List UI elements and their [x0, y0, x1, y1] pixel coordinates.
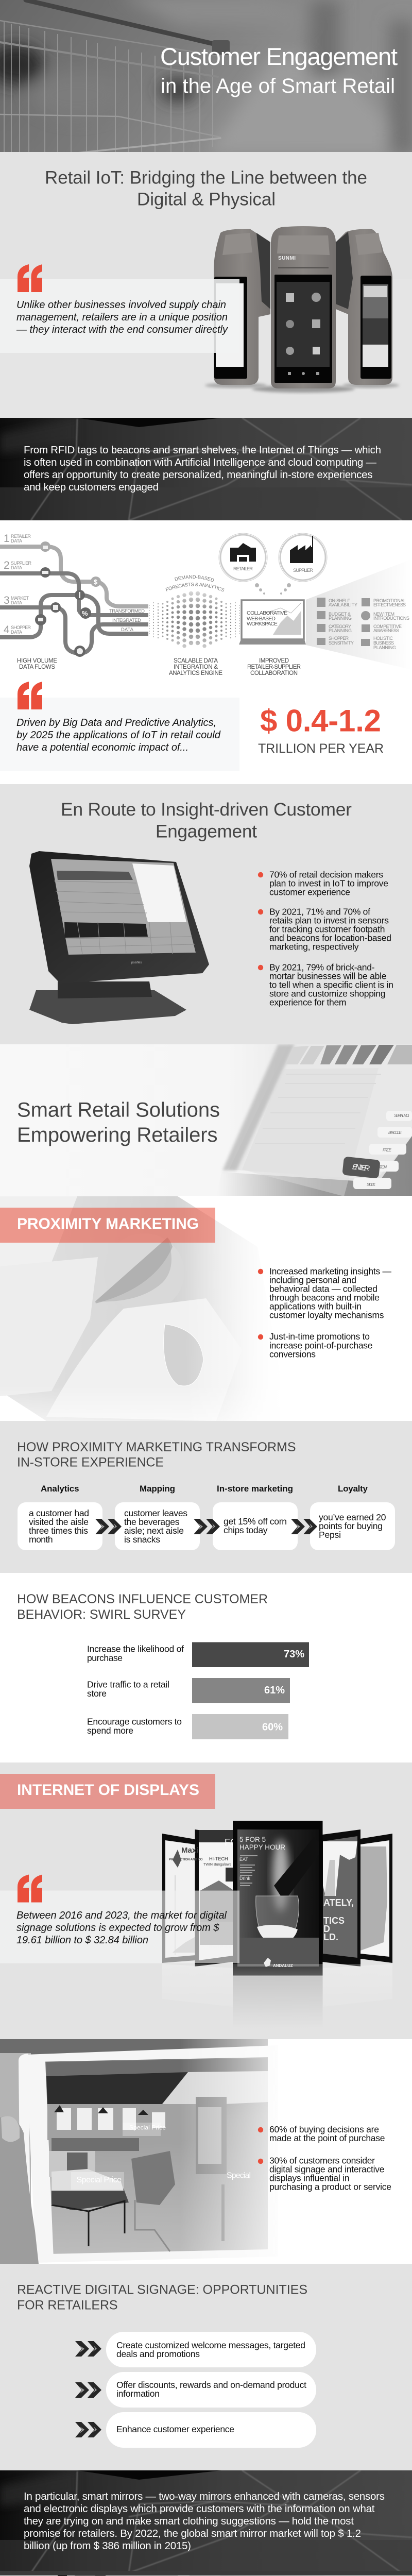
quote text [16, 1910, 227, 1946]
bullet list: retails plan to invest in sensors [269, 916, 389, 926]
diagram: data flows: CATEGORY [329, 624, 351, 629]
bullet list: plan to invest in IoT to improve [269, 878, 388, 888]
panel: how proximity marketing transforms [0, 1421, 412, 1573]
step: in-store marketing [213, 1484, 298, 1550]
diagram: data flows: SHOPPER [329, 636, 349, 641]
image: digital signage displays: Real Estate [209, 1944, 234, 1950]
diagram: data flows: SHOPPER [11, 625, 31, 630]
step: in-store marketing: get 15% off corn [224, 1516, 287, 1527]
image: digital signage displays: PRODUCTION AND CO [169, 1858, 203, 1861]
bar chart: Drive traffic to a retail [87, 1680, 169, 1690]
section banner: INTERNET OF DISPLAYS [17, 1782, 199, 1799]
statement text: and keep customers engaged [24, 481, 159, 493]
quote text: 19.61 billion to $ 32.84 billion [16, 1935, 148, 1946]
diagram: data flows: WEB-BASED [247, 616, 276, 622]
step: in-store marketing: In-store marketing [217, 1484, 293, 1494]
panel: reactive digital signage [0, 2264, 412, 2470]
heading: HOW BEACONS INFLUENCE CUSTOMER [17, 1592, 268, 1606]
image: digital signage displays: ATELY, [323, 1897, 354, 1908]
heading [17, 2283, 307, 2312]
title [160, 43, 398, 97]
step: loyalty: Pepsi [319, 1530, 341, 1540]
statement text [24, 2490, 385, 2552]
diagram: data flows [0, 533, 409, 676]
list item: welcome messages: Create customized welcome messages, targeted [116, 2340, 305, 2350]
quote text: — they interact with the end consumer directly [16, 324, 228, 335]
diagram: data flows: IMPROVED [259, 658, 289, 664]
icon: quotation mark [18, 264, 42, 292]
title: Customer Engagement [160, 43, 398, 70]
diagram: data flows: SENSITIVITY [329, 640, 354, 646]
image: digital signage displays: HAPPY HOUR [239, 1843, 285, 1851]
heading: FOR RETAILERS [17, 2298, 118, 2312]
step: mapping [115, 1484, 200, 1550]
section banner [0, 1208, 215, 1243]
bullet list: and beacons for location-based [269, 933, 391, 943]
panel: how beacons influence behavior [0, 1573, 412, 1762]
bullet list: increase point-of-purchase [269, 1340, 373, 1350]
arrow: chevrons [194, 1519, 220, 1534]
image: handheld POS terminals: SUNMI [278, 256, 296, 261]
diagram: data flows: RETAILER [11, 534, 31, 539]
bullet list: for tracking customer footpath [269, 924, 385, 935]
diagram: data flows: COLLABORATION [250, 670, 298, 676]
step: analytics: month [29, 1534, 53, 1545]
list item: enhance experience [75, 2412, 316, 2448]
diagram: data flows: MARKET [11, 596, 29, 601]
diagram: data flows: DATA FLOWS [19, 664, 55, 670]
heading: HOW PROXIMITY MARKETING TRANSFORMS [17, 1440, 296, 1454]
step: loyalty: points for buying [319, 1521, 383, 1531]
diagram: data flows: BUSINESS [373, 640, 394, 646]
heading [17, 1099, 220, 1146]
step: mapping: customer leaves [124, 1508, 187, 1518]
bullet list: made at the point of purchase [269, 2133, 385, 2143]
bar chart: Encourage customers to [87, 1716, 182, 1726]
diagram: data flows: PLANNING [373, 645, 396, 650]
heading: Empowering Retailers [17, 1124, 217, 1146]
bullet list: behavioral data — collected [269, 1284, 377, 1294]
bullet list: mortar businesses will be able [269, 971, 386, 981]
statement text: billion (up from $ 386 million in 2015) [24, 2540, 191, 2552]
heading: Smart Retail Solutions [17, 1099, 220, 1122]
diagram: data flows: SUPPLIER [11, 561, 32, 566]
quote text: Between 2016 and 2023, the market for digital [16, 1910, 227, 1921]
diagram: data flows: EFFECTIVENESS [373, 602, 406, 607]
heading [61, 799, 352, 842]
list item: discounts [75, 2372, 316, 2408]
quote text: Unlike other businesses involved supply chain [16, 299, 226, 311]
quote text [16, 717, 221, 753]
quote text [16, 299, 228, 335]
heading: IN-STORE EXPERIENCE [17, 1455, 164, 1470]
panel: smart retail solutions: BARCODE [388, 1130, 402, 1135]
icon: quotation mark [18, 1874, 42, 1902]
image: digital signage displays: Drink [239, 1876, 251, 1881]
step: analytics: three times this [29, 1526, 88, 1536]
image: digital signage displays: LD. [323, 1932, 338, 1942]
diagram: data flows: INTRODUCTIONS [373, 616, 409, 621]
quote text: signage solutions is expected to grow from $ [16, 1922, 219, 1934]
bullet list: to tell when a specific client is in [269, 979, 393, 990]
diagram: data flows: INTEGRATED [112, 618, 141, 623]
step: analytics: a customer had [29, 1508, 89, 1518]
bullet list: 60% of buying decisions are [269, 2124, 379, 2134]
list item: discounts: information [116, 2388, 160, 2399]
diagram: data flows: HOLISTIC [373, 636, 393, 641]
image: digital signage displays: Maxi [181, 1846, 198, 1855]
heading [17, 1592, 268, 1622]
stat: economic impact [258, 704, 384, 756]
heading: Retail IoT: Bridging the Line between the [45, 168, 367, 188]
diagram: data flows: DATA [121, 627, 134, 633]
icon: quotation mark [18, 682, 42, 709]
panel: proximity marketing [0, 1196, 412, 1421]
diagram: data flows: PLANNING [329, 616, 352, 621]
statement text: From RFID tags to beacons and smart shelves, the Internet of Things — which [24, 444, 381, 456]
step: mapping: the beverages [124, 1517, 180, 1527]
heading: Engagement [156, 821, 257, 842]
bullet list: customer experience [269, 887, 350, 897]
step: loyalty [310, 1484, 395, 1550]
image: tablet with store view: Special Price [129, 2124, 166, 2131]
quote text: have a potential economic impact of... [16, 742, 188, 753]
bullet list: experience for them [269, 997, 346, 1007]
list item: enhance experience: Enhance customer experience [116, 2424, 234, 2434]
bullet list: purchasing a product or service [269, 2182, 391, 2192]
image: digital signage displays [154, 1821, 402, 2028]
list item: discounts: Offer discounts, rewards and on-demand product [116, 2380, 306, 2390]
image: digital signage displays: HI-TECH [209, 1856, 228, 1861]
diagram: data flows: FORECASTS & ANALYTICS [166, 582, 225, 591]
diagram: data flows: DATA [11, 630, 22, 635]
image: digital signage displays: EAT [239, 1857, 248, 1862]
panel: en route [0, 784, 412, 1044]
heading: BEHAVIOR: SWIRL SURVEY [17, 1607, 186, 1622]
stat: economic impact: $ 0.4-1.2 [260, 704, 381, 738]
hero banner [0, 0, 412, 152]
heading [45, 168, 367, 209]
panel: retail iot [0, 152, 412, 418]
smart retail solutions: enter button: ENTER [352, 1162, 370, 1173]
bullet list: through beacons and mobile [269, 1293, 380, 1303]
diagram: data flows: NEW ITEM [373, 612, 394, 617]
diagram: data flows: SCALABLE DATA [174, 658, 218, 664]
bullet list: customer loyalty mechanisms [269, 1310, 384, 1320]
bullet list: marketing, respectively [269, 942, 359, 952]
bullet list: Increased marketing insights — [269, 1266, 391, 1277]
step: analytics: Analytics [41, 1484, 79, 1494]
diagram: data flows: DEMAND-BASED [175, 575, 214, 582]
bar chart: Increase the likelihood of [87, 1644, 184, 1654]
step: analytics: visited the aisle [29, 1517, 89, 1527]
step: mapping: aisle; next aisle [124, 1526, 184, 1536]
arrow: chevrons [95, 1519, 122, 1534]
quote text: management, retailers are in a unique position [16, 312, 228, 323]
diagram: data flows: 3 [4, 595, 10, 606]
diagram: data flows: 4 [4, 624, 10, 636]
bar chart: purchase [87, 1653, 123, 1663]
diagram: data flows: TRANSFORMED [109, 608, 145, 614]
panel: data diagram and economic impact [0, 533, 409, 756]
diagram: data flows: DATA [11, 565, 22, 570]
section banner: PROXIMITY MARKETING [17, 1215, 199, 1232]
statement text: offers an opportunity to create personalized, meaningful in-store experiences [24, 469, 373, 481]
quote text: by 2025 the applications of IoT in retail could [16, 730, 221, 741]
bar chart [87, 1642, 309, 1739]
step: in-store marketing: chips today [224, 1525, 268, 1535]
list item: welcome messages: deals and promotions [116, 2349, 200, 2359]
bullet list: By 2021, 79% of brick-and- [269, 962, 375, 972]
statement text: promise for retailers. By 2022, the global smart mirror market will top $ 1.2 [24, 2528, 361, 2539]
arrow: chevrons [291, 1519, 317, 1534]
step: loyalty: you’ve earned 20 [319, 1512, 386, 1522]
image: digital signage displays: TWIN Bungalows [203, 1863, 232, 1867]
image: tablet with store view: Special Price [76, 2176, 122, 2184]
callout band [0, 1891, 239, 1963]
bar chart: 61% [264, 1685, 285, 1696]
bar chart: spend more [87, 1725, 133, 1736]
image: handheld POS terminals [205, 226, 399, 393]
diagram: data flows: DATA [11, 538, 22, 544]
heading [17, 1440, 296, 1470]
panel: dark statement [0, 418, 412, 520]
bullet list: 30% of customers consider [269, 2156, 375, 2166]
panel: smart retail solutions: SERIAL NO. [394, 1113, 409, 1118]
step: mapping: Mapping [140, 1484, 175, 1494]
panel: self-service and navigation [58, 2575, 315, 2576]
diagram: data flows: 2 [4, 560, 10, 571]
bar chart: 60% [262, 1722, 283, 1733]
diagram: data flows: INTEGRATION & [174, 664, 218, 670]
image: tablet with store view [0, 2039, 412, 2264]
panel: dark statement smart mirrors [0, 2470, 412, 2575]
bullet list: including personal and [269, 1275, 356, 1285]
diagram: data flows: AWARENESS [373, 628, 399, 633]
section banner [0, 1774, 215, 1809]
diagram: data flows: $ [94, 578, 98, 586]
stat: economic impact: TRILLION PER YEAR [258, 741, 384, 756]
bullet list [258, 2124, 391, 2192]
quote text: Driven by Big Data and Predictive Analytics, [16, 717, 216, 728]
panel: smart retail solutions: PRICE [383, 1148, 392, 1153]
image: self-service kiosks with customer [0, 2575, 412, 2576]
diagram: data flows: AVAILABILITY [329, 602, 357, 607]
diagram: data flows: WORKSPACE [247, 621, 278, 627]
bullet list [258, 1266, 391, 1359]
panel: tablet in store [0, 2039, 391, 2264]
list item: welcome messages [75, 2332, 316, 2367]
image: beacon device [0, 1196, 412, 1421]
bullet list: displays influential in [269, 2173, 350, 2183]
diagram: data flows: HIGH VOLUME [17, 658, 57, 664]
diagram: data flows: PROMOTIONAL [373, 598, 406, 603]
image: digital signage displays: D [323, 1924, 330, 1934]
heading: Digital & Physical [137, 190, 276, 209]
bullet list: By 2021, 71% and 70% of [269, 907, 370, 917]
statement text [24, 444, 381, 493]
panel: internet of displays [0, 1762, 412, 2039]
diagram: data flows: COLLABORATIVE [247, 610, 287, 616]
image: POS monitor [29, 851, 209, 1024]
diagram: data flows: % [82, 609, 88, 617]
bullet list: applications with built-in [269, 1301, 362, 1312]
diagram: data flows: ANALYTICS ENGINE [169, 670, 222, 676]
image: digital signage displays: ANDALUZ [273, 1963, 293, 1968]
diagram: data flows: BUDGET & [329, 612, 351, 617]
bullet list: conversions [269, 1349, 316, 1359]
diagram: data flows: 1 [4, 533, 10, 545]
image: digital signage displays: FC [225, 1837, 237, 1848]
image: POS monitor: posiflex [131, 961, 142, 964]
bullet list [258, 869, 393, 1007]
bullet list: store and customize shopping [269, 988, 385, 998]
diagram: data flows: SUPPLIER [293, 568, 313, 573]
bullet list: 70% of retail decision makers [269, 869, 383, 879]
bar chart: 73% [284, 1649, 304, 1660]
diagram: data flows: RETAILER [233, 566, 253, 572]
step: analytics [18, 1484, 102, 1550]
panel: smart retail solutions: LOCATION [372, 1165, 387, 1170]
diagram: data flows: PLANNING [329, 628, 352, 633]
panel: smart retail solutions: STOCK [367, 1182, 376, 1187]
diagram: data flows: ON-SHELF [329, 598, 350, 603]
diagram: data flows: COMPETITIVE [373, 624, 402, 629]
step: loyalty: Loyalty [338, 1484, 368, 1494]
bullet list: digital signage and interactive [269, 2164, 384, 2175]
callout band [0, 698, 239, 771]
image: digital signage displays: 5 FOR 5 [239, 1836, 266, 1843]
heading: REACTIVE DIGITAL SIGNAGE: OPPORTUNITIES [17, 2283, 307, 2297]
callout band [0, 279, 239, 353]
bullet list: Just-in-time promotions to [269, 1331, 370, 1342]
image: tablet with store view: Special [227, 2171, 251, 2180]
panel: smart retail solutions [115, 1044, 412, 1196]
step: mapping: is snacks [124, 1534, 160, 1545]
smart retail solutions: enter button [342, 1157, 381, 1179]
heading: En Route to Insight-driven Customer [61, 799, 352, 820]
bar chart: store [87, 1688, 107, 1699]
image: digital signage displays: TICS [323, 1916, 345, 1926]
statement text: and electronic displays which provide customers with the information on what [24, 2503, 375, 2515]
statement text: In particular, smart mirrors — two-way mirrors enhanced with cameras, sensors [24, 2490, 385, 2502]
title: in the Age of Smart Retail [161, 75, 395, 97]
statement text: they are trying on and make smart clothing suggestions — hold the most [24, 2515, 354, 2527]
diagram: data flows: DATA [11, 600, 22, 605]
diagram: data flows: RETAILER-SUPPLIER [247, 664, 301, 670]
statement text: is often used in combination with Artificial Intelligence and cloud computing — [24, 456, 377, 468]
